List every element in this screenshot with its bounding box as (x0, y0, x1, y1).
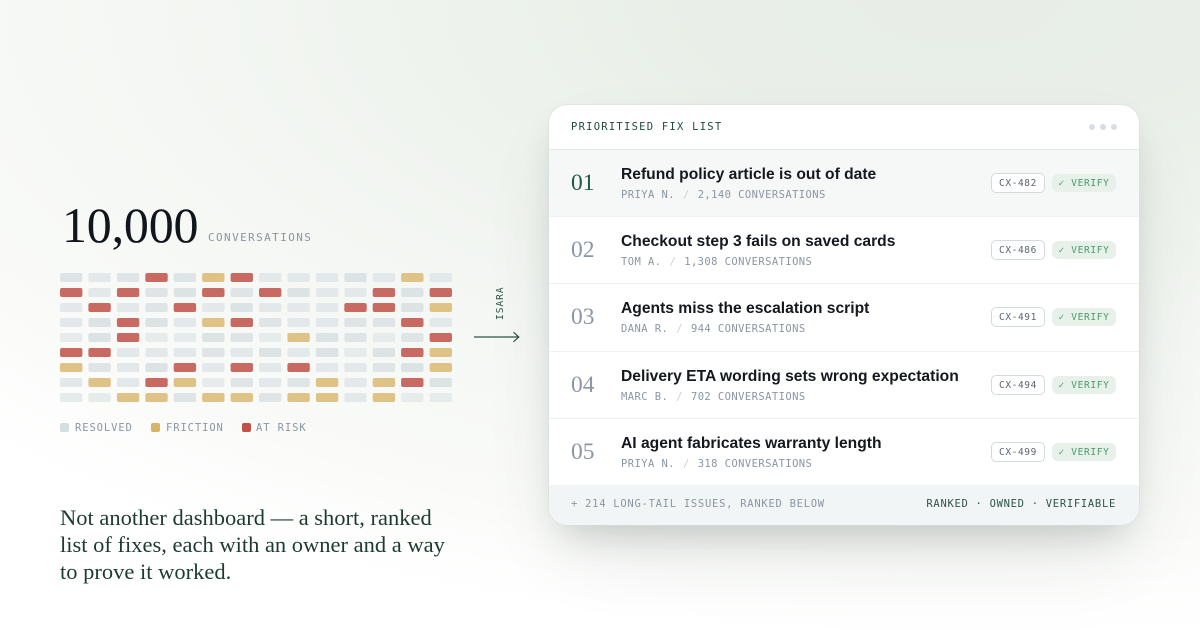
ticket id: CX-491 (999, 312, 1037, 323)
fix row 04 (549, 352, 1139, 419)
arrow label: ISARA (495, 286, 506, 320)
arrow shape (474, 332, 520, 342)
long-tail note: + 214 LONG-TAIL ISSUES, RANKED BELOW (571, 498, 825, 510)
closing statement: list of fixes, each with an owner and a way (60, 532, 445, 557)
ticket id (991, 307, 1045, 327)
verify badge: ✓ VERIFY (1059, 312, 1109, 323)
ticket id: CX-486 (999, 245, 1037, 256)
verify badge (1052, 308, 1116, 326)
owner and volume: MARC B. / 702 CONVERSATIONS (621, 391, 806, 403)
unit label: CONVERSATIONS (208, 231, 312, 244)
legend (60, 422, 307, 434)
verify badge: ✓ VERIFY (1059, 245, 1109, 256)
card footer (549, 485, 1139, 525)
panel: prioritised fix list card (549, 105, 1139, 525)
properties note: RANKED · OWNED · VERIFIABLE (926, 498, 1116, 510)
rank: 03 (571, 304, 594, 330)
verify badge (1052, 376, 1116, 394)
fix title: Checkout step 3 fails on saved cards (621, 233, 895, 250)
verify badge (1052, 241, 1116, 259)
rank: 04 (571, 372, 594, 398)
verify badge: ✓ VERIFY (1059, 178, 1109, 189)
number: 10,000 (62, 197, 198, 253)
ticket id (991, 173, 1045, 193)
rank: 05 (571, 439, 594, 465)
owner and volume: PRIYA N. / 318 CONVERSATIONS (621, 458, 812, 470)
card heading: PRIORITISED FIX LIST (571, 121, 722, 133)
rank: 01 (571, 170, 594, 196)
verify badge (1052, 174, 1116, 192)
fix row 01 (549, 150, 1139, 217)
fix row 05 (571, 435, 1116, 470)
closing statement (60, 505, 445, 584)
arrow: Isara transforms conversations into fix list (474, 286, 520, 342)
owner and volume: PRIYA N. / 2,140 CONVERSATIONS (621, 189, 826, 201)
fix title: Refund policy article is out of date (621, 166, 876, 183)
fix title: Agents miss the escalation script (621, 300, 869, 317)
fix title: Delivery ETA wording sets wrong expectation (621, 368, 959, 385)
fix row 03 (549, 284, 1139, 352)
ticket id (991, 240, 1045, 260)
legend: resolved: RESOLVED (75, 422, 133, 434)
legend: friction: FRICTION (166, 422, 224, 434)
fix row 02 (549, 217, 1139, 284)
verify badge: ✓ VERIFY (1059, 447, 1109, 458)
heatmap grid of conversations (60, 273, 452, 402)
ticket id (991, 442, 1045, 462)
owner and volume: DANA R. / 944 CONVERSATIONS (621, 323, 806, 335)
verify badge: ✓ VERIFY (1059, 380, 1109, 391)
legend: at risk: AT RISK (256, 422, 307, 434)
closing statement: Not another dashboard — a short, ranked (60, 505, 432, 530)
owner and volume: TOM A. / 1,308 CONVERSATIONS (621, 256, 812, 268)
big number: 10,000 conversations (62, 197, 312, 253)
ticket id: CX-482 (999, 178, 1037, 189)
ticket id: CX-494 (999, 380, 1037, 391)
closing statement: to prove it worked. (60, 559, 231, 584)
card header (549, 105, 1139, 150)
ticket id: CX-499 (999, 447, 1037, 458)
verify badge (1052, 443, 1116, 461)
rank: 02 (571, 237, 594, 263)
window dots (1089, 124, 1117, 130)
fix title: AI agent fabricates warranty length (621, 435, 881, 452)
ticket id (991, 375, 1045, 395)
